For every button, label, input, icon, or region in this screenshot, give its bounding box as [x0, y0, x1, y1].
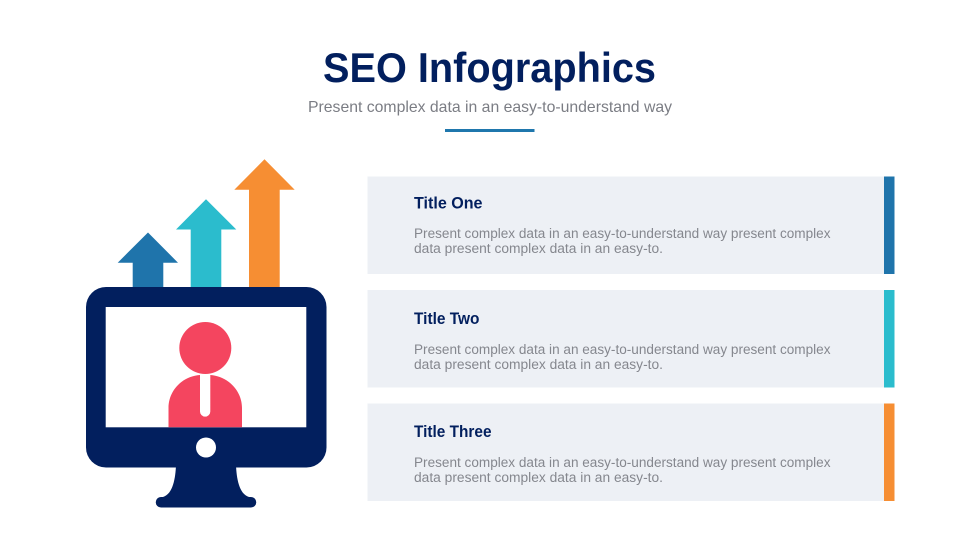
icon: rising arrows: [118, 159, 295, 288]
body text: Present complex data in an easy-to-understand way present complex: [414, 455, 831, 470]
icon: computer monitor: [86, 287, 326, 508]
body text: data present complex data in an easy-to.: [414, 470, 663, 485]
accent bar: [884, 404, 894, 501]
heading: Title One: [414, 194, 482, 212]
panel: title three: [368, 404, 894, 501]
accent bar: [884, 290, 894, 388]
accent bar: [884, 176, 894, 274]
arrow: orange: [234, 159, 295, 288]
monitor stand: [156, 465, 256, 508]
title: SEO Infographics: [323, 44, 656, 91]
heading: Title Three: [414, 423, 492, 441]
arrow: teal: [176, 199, 236, 288]
subtitle: Present complex data in an easy-to-understand way: [308, 99, 672, 116]
panel background: [368, 290, 884, 388]
icon: person: [168, 322, 242, 427]
body text: data present complex data in an easy-to.: [414, 241, 663, 256]
panel background: [368, 176, 884, 274]
person head: [179, 322, 231, 374]
arrow: blue: [118, 232, 178, 288]
person body: [168, 375, 242, 427]
monitor button: [196, 438, 216, 458]
body text: data present complex data in an easy-to.: [414, 357, 663, 372]
body text: Present complex data in an easy-to-understand way present complex: [414, 226, 831, 241]
monitor screen: [106, 307, 306, 427]
panel background: [368, 404, 884, 501]
panel: title two: [368, 290, 894, 388]
body text: Present complex data in an easy-to-understand way present complex: [414, 342, 831, 357]
panel: title one: [368, 176, 894, 274]
monitor body: [86, 287, 326, 468]
title underline: [445, 129, 534, 132]
heading: Title Two: [414, 310, 480, 328]
